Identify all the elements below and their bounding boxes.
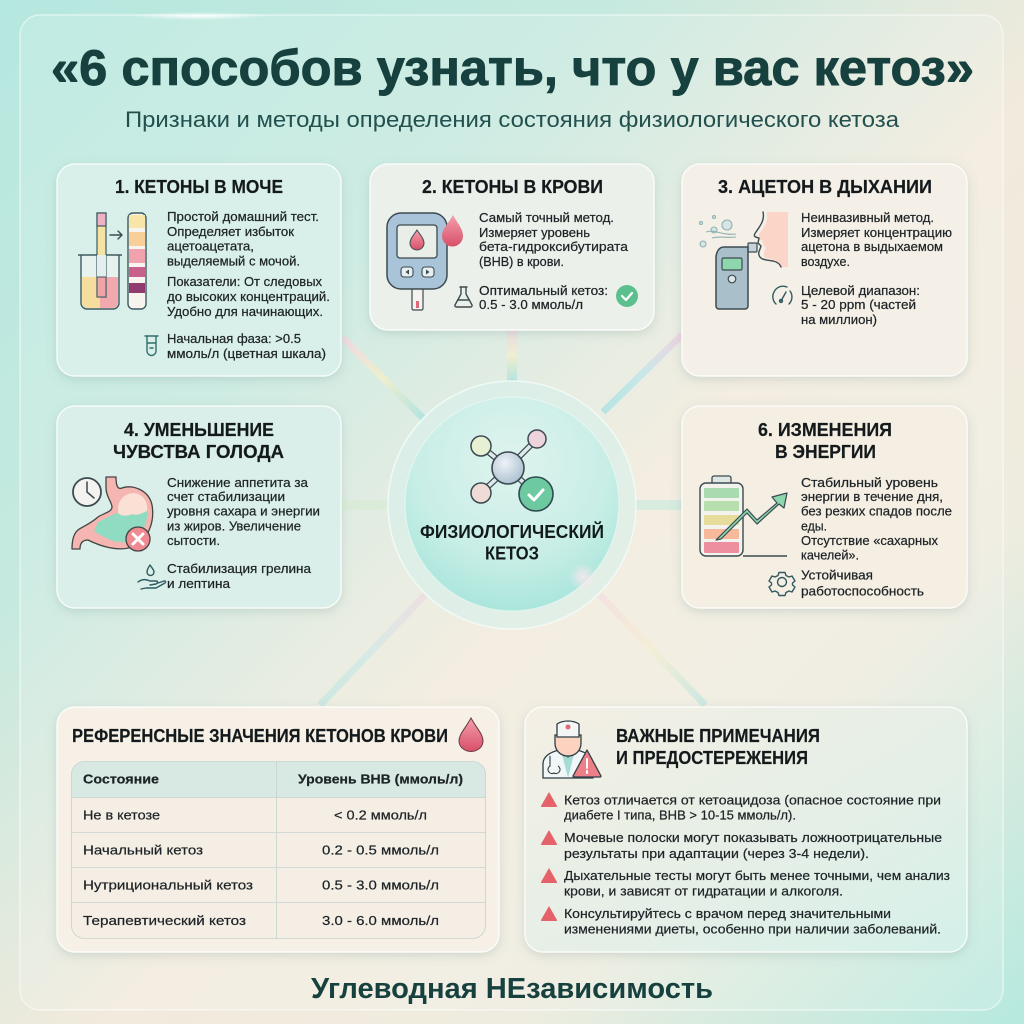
central circle: physiological ketosis	[388, 381, 636, 629]
panel: 4. reduced hunger	[57, 406, 341, 608]
heading: card 1: 1. КЕТОНЫ В МОЧЕ	[115, 177, 283, 197]
table: ketone levels: Терапевтический кетоз	[83, 913, 246, 928]
text: card 4 description	[167, 476, 320, 548]
text: notes list	[564, 792, 950, 936]
table: ketone levels: Начальный кетоз	[83, 842, 203, 858]
icon: molecule with check	[471, 430, 553, 511]
table: ketone levels	[72, 762, 486, 938]
text: card 3 description: воздухе.	[801, 255, 850, 269]
text: card 4 description: счет стабилизации	[167, 490, 285, 504]
table: ketone levels: 0.5 - 3.0 ммоль/л	[322, 878, 439, 892]
table: ketone levels: Уровень BHB (ммоль/л)	[298, 772, 463, 786]
panel: 6. energy changes	[682, 406, 967, 608]
text: card 4 description: из жиров. Увеличение	[167, 520, 301, 534]
text: card 4 description: Снижение аппетита за	[167, 476, 308, 490]
table: ketone levels: < 0.2 ммоль/л	[334, 808, 427, 822]
text: target range: Целевой диапазон:	[801, 284, 920, 298]
text: card 1 description: Показатели: От следовых	[167, 275, 323, 289]
text: card 1 threshold: Начальная фаза: >0.5	[167, 332, 301, 346]
text: card 2 description: бета-гидроксибутирата	[479, 240, 628, 254]
text: sustained performance: Устойчивая	[801, 568, 873, 582]
text: card 2 description: (BHB) в крови.	[479, 255, 564, 269]
icon: gauge	[773, 286, 792, 304]
text: card 1 description: Определяет избыток	[167, 225, 295, 239]
icon: warning triangles	[541, 792, 557, 921]
text: card 1 description: выделяемый с мочой.	[167, 254, 300, 268]
text: hormones: и лептина	[167, 577, 230, 591]
text: card 2 description: Измеряет уровень	[479, 226, 590, 240]
text: notes list: изменениями диеты, особенно при наличии заболеваний.	[564, 922, 941, 936]
heading: card 2: 2. КЕТОНЫ В КРОВИ	[422, 177, 603, 197]
text: card 1 threshold	[167, 332, 326, 361]
text: card 1 description	[167, 210, 330, 319]
text: card 6 description: без резких спадов после	[801, 504, 952, 518]
text: notes list: результаты при адаптации (через 3-4 недели).	[564, 846, 869, 861]
table: ketone levels: 0.2 - 0.5 ммоль/л	[322, 842, 439, 858]
text: card 3 description	[801, 211, 952, 269]
heading: card 6: 6. ИЗМЕНЕНИЯ	[758, 420, 892, 440]
text: card 4 description: уровня сахара и энергии	[167, 504, 320, 518]
icon: battery with rising arrow	[700, 476, 787, 556]
heading: card 6	[758, 420, 892, 462]
text: card 1 description: до высоких концентраций.	[167, 290, 330, 304]
label: center	[420, 521, 604, 564]
panel: reference table	[57, 707, 499, 952]
title: «6 способов узнать, что у вас кетоз»	[51, 40, 974, 96]
text: card 6 description: Отсутствие «сахарных	[801, 534, 939, 548]
table: ketone levels: Не в кетозе	[83, 808, 160, 822]
text: hormones: Стабилизация грелина	[167, 562, 311, 576]
text: card 6 description: качелей».	[801, 548, 859, 562]
text: optimal range: Оптимальный кетоз:	[479, 284, 608, 298]
heading: card 3: 3. АЦЕТОН В ДЫХАНИИ	[718, 177, 932, 197]
heading: notes: И ПРЕДОСТЕРЕЖЕНИЯ	[616, 748, 808, 768]
panel: 2. blood ketones	[370, 164, 654, 330]
icon: doctor with warning sign	[543, 721, 601, 778]
text: optimal range	[479, 284, 608, 312]
text: card 6 description	[801, 476, 952, 562]
icon: gear	[769, 572, 795, 596]
text: notes list: Дыхательные тесты могут быть менее точными, чем анализ	[564, 868, 950, 883]
icon: glucometer with blood drop	[387, 213, 463, 310]
text: card 6 description: Стабильный уровень	[801, 476, 938, 490]
footer: brand: Углеводная НЕзависимость	[311, 973, 713, 1005]
heading: notes: ВАЖНЫЕ ПРИМЕЧАНИЯ	[616, 726, 820, 746]
icon: hand with drop	[138, 565, 166, 589]
heading: card 4: 4. УМЕНЬШЕНИЕ	[124, 420, 274, 440]
text: card 6 description: еды.	[801, 520, 827, 534]
heading: card 4: ЧУВСТВА ГОЛОДА	[113, 442, 284, 462]
text: notes list: Мочевые полоски могут показывать ложноотрицательные	[564, 830, 942, 845]
text: sustained performance: работоспособность	[801, 584, 924, 598]
text: notes list: Консультируйтесь с врачом перед значительными	[564, 906, 891, 921]
icon: small test tube	[145, 336, 158, 356]
panel: 1. urine ketones	[57, 164, 341, 376]
text: card 6 description: энергии в течение дня,	[801, 490, 943, 504]
text: card 3 description: Неинвазивный метод.	[801, 211, 934, 225]
connector lines to the central circle	[320, 330, 705, 705]
icon: blood drop	[459, 718, 483, 752]
text: card 1 threshold: ммоль/л (цветная шкала)	[167, 347, 326, 361]
text: hormones	[167, 562, 311, 591]
table: ketone levels: Нутрициональный кетоз	[83, 878, 253, 892]
label: center: ФИЗИОЛОГИЧЕСКИЙ	[420, 521, 604, 542]
text: notes list: Кетоз отличается от кетоацидоза (опасное состояние при	[564, 792, 941, 808]
text: card 1 description: Простой домашний тест.	[167, 210, 319, 224]
icon: beaker with test strip	[78, 213, 146, 309]
icon: stomach and clock	[72, 477, 153, 551]
text: target range: на миллион)	[801, 313, 877, 327]
icon: flask	[455, 287, 472, 307]
table: ketone levels: 3.0 - 6.0 ммоль/л	[322, 913, 439, 928]
text: card 2 description	[479, 211, 628, 269]
label: center: КЕТОЗ	[485, 544, 539, 564]
text: target range: 5 - 20 ppm (частей	[801, 298, 916, 312]
panel: 3. breath acetone	[682, 164, 967, 376]
icon: breathalyzer and face	[700, 212, 788, 309]
text: card 1 description: Удобно для начинающих.	[167, 305, 323, 319]
text: card 3 description: ацетона в выдыхаемом	[801, 240, 943, 254]
text: card 3 description: Измеряет концентрацию	[801, 226, 952, 240]
text: card 4 description: сытости.	[167, 534, 220, 548]
heading: notes	[616, 726, 820, 768]
text: sustained performance	[801, 568, 924, 598]
text: target range	[801, 284, 920, 327]
icon: green check	[616, 285, 638, 307]
text: notes list: диабете I типа, BHB > 10-15 ммоль/л).	[564, 808, 796, 822]
text: card 1 description: ацетоацетата,	[167, 240, 254, 254]
heading: card 4	[113, 420, 284, 462]
heading: reference values: РЕФЕРЕНСНЫЕ ЗНАЧЕНИЯ КЕТОНОВ КРОВИ	[72, 726, 448, 746]
text: notes list: крови, и зависят от гидратации и алкоголя.	[564, 884, 843, 898]
panel: important notes	[525, 707, 967, 952]
heading: card 6: В ЭНЕРГИИ	[775, 442, 876, 462]
text: optimal range: 0.5 - 3.0 ммоль/л	[479, 298, 583, 312]
subtitle: Признаки и методы определения состояния физиологического кетоза	[125, 107, 900, 132]
text: card 2 description: Самый точный метод.	[479, 211, 614, 225]
table: ketone levels: Состояние	[83, 772, 159, 786]
